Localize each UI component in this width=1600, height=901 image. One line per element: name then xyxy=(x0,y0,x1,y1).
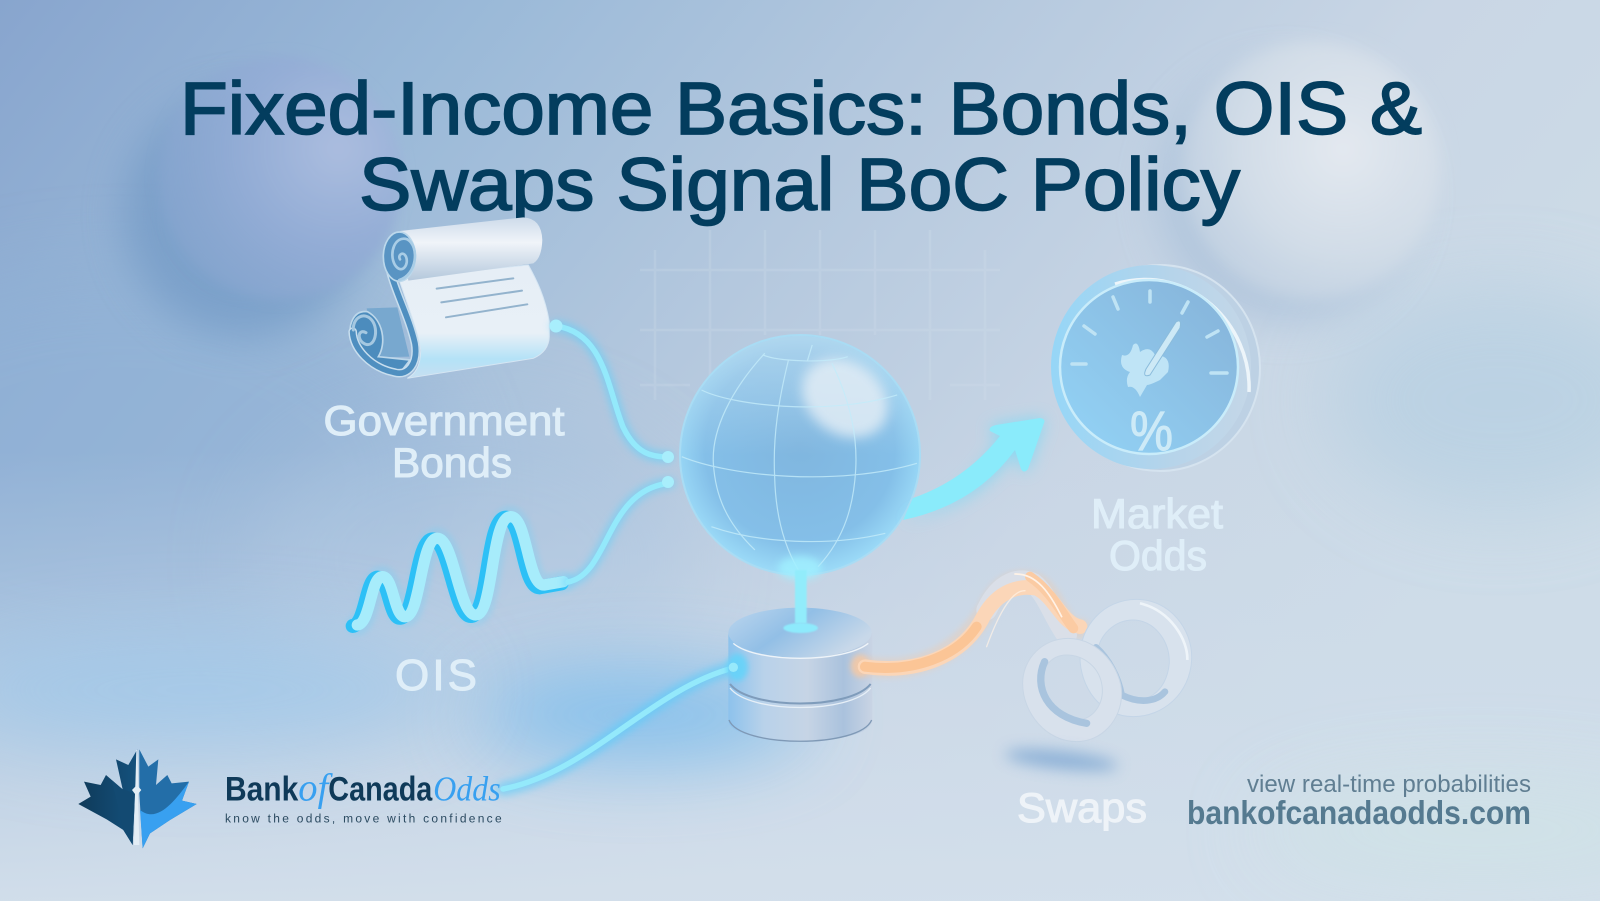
call to action xyxy=(1187,771,1531,831)
label: Swaps: Swaps xyxy=(1017,784,1147,831)
logo wordmark: Bank xyxy=(225,771,298,809)
ring shadow xyxy=(1004,745,1119,775)
connector: bonds to globe xyxy=(550,320,674,463)
pedestal top xyxy=(728,608,872,658)
top roll xyxy=(400,217,542,281)
CN tower xyxy=(132,750,141,845)
call to action: bankofcanadaodds.com xyxy=(1187,794,1531,831)
gauge rim xyxy=(1060,265,1260,471)
logo wordmark xyxy=(225,766,501,810)
logo wordmark: Odds xyxy=(433,770,501,809)
label: OIS: OIS xyxy=(395,651,477,700)
gauge needle xyxy=(1145,321,1180,376)
logo tagline: know the odds, move with confidence xyxy=(225,812,502,826)
left node glow xyxy=(727,653,748,681)
connector: logo to pedestal xyxy=(503,668,733,789)
globe highlight xyxy=(787,342,903,454)
icon: market odds gauge xyxy=(1051,265,1260,471)
label: Market Odds: Odds xyxy=(1109,532,1207,579)
label: Government Bonds xyxy=(324,397,565,486)
pedestal groove xyxy=(730,684,871,703)
right node glow xyxy=(851,655,869,677)
bottom spiral barrel xyxy=(367,307,409,357)
percent sign: % xyxy=(1130,399,1173,462)
label: Government Bonds: Government xyxy=(324,397,565,444)
pedestal xyxy=(727,570,872,741)
title: Swaps Signal BoC Policy xyxy=(359,143,1240,226)
top spiral xyxy=(383,232,415,281)
connector: OIS to globe xyxy=(568,476,674,582)
decorative sphere right xyxy=(1157,40,1442,323)
decorative sphere left xyxy=(123,56,402,337)
globe base glow xyxy=(778,556,822,580)
title xyxy=(180,67,1422,226)
globe xyxy=(680,335,920,580)
icon: OIS wave xyxy=(353,517,563,626)
left ring xyxy=(1023,638,1122,742)
label: Government Bonds: Bonds xyxy=(392,439,512,486)
logo wordmark: of xyxy=(298,766,333,810)
gauge face xyxy=(1060,280,1238,454)
scroll S band xyxy=(353,247,416,373)
logo xyxy=(78,749,502,848)
swaps ribbon xyxy=(865,574,1080,668)
icon: government bond scroll xyxy=(350,217,549,378)
logo maple leaf xyxy=(78,749,197,848)
title: Fixed-Income Basics: Bonds, OIS & xyxy=(180,67,1422,150)
glowing stem xyxy=(795,570,807,623)
icon: swaps rings xyxy=(1004,599,1192,775)
sheet text lines xyxy=(437,278,527,317)
call to action: view real-time probabilities xyxy=(1247,771,1531,798)
maple leaf xyxy=(1121,344,1169,397)
logo wordmark: Canada xyxy=(328,771,433,809)
arrow to market odds xyxy=(903,418,1044,520)
globe meridians xyxy=(682,345,917,570)
label: Market Odds: Market xyxy=(1091,490,1223,537)
right ring xyxy=(1080,599,1192,717)
gauge ticks xyxy=(1072,291,1227,373)
sheet body xyxy=(399,265,549,378)
background grid xyxy=(640,230,1000,400)
bottom spiral cap xyxy=(350,312,410,375)
label: Market Odds xyxy=(1091,490,1223,579)
